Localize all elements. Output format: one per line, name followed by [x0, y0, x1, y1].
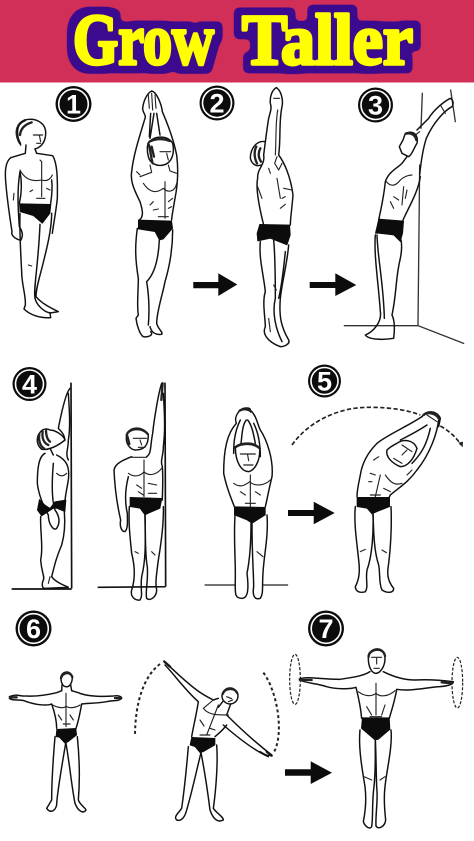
- floor: [205, 583, 288, 587]
- title: Grow: [73, 0, 214, 80]
- dashed motion arcs: [135, 664, 279, 753]
- step 3 badge: 3: [368, 90, 383, 120]
- step 4 badge: [12, 367, 46, 401]
- step 2 badge: [200, 86, 234, 120]
- step 5 badge: [308, 364, 341, 398]
- step 6 badge: 6: [26, 614, 41, 644]
- step 3 badge: [358, 88, 393, 122]
- step 2 badge: 2: [209, 88, 225, 118]
- figure: step 5 arms overhead: [205, 408, 288, 599]
- header banner: [0, 0, 474, 82]
- step 5 badge: 5: [317, 366, 332, 396]
- step 6 badge: [16, 610, 52, 646]
- title: Taller: [242, 0, 413, 80]
- figure: step 4 side view against wall: [12, 383, 72, 589]
- figure: step 7 arm circles: [290, 649, 463, 828]
- dashed motion arc: [292, 407, 461, 445]
- title: [73, 0, 413, 80]
- arrow: step 5: [288, 502, 335, 524]
- wall and floor: [98, 383, 166, 587]
- figure: step 5 side bend: [292, 407, 463, 592]
- step 1 badge: 1: [66, 90, 81, 120]
- arrow: step 2 to step 3: [310, 273, 356, 296]
- figure: step 2 front view arms up: [131, 91, 178, 337]
- figure: step 3 against wall: [344, 90, 464, 343]
- arrow: step 2 front to side: [193, 273, 237, 296]
- dashed circles: [290, 654, 300, 704]
- figure: step 1 standing: [5, 119, 58, 318]
- step 4 badge: 4: [22, 370, 37, 400]
- figure: step 6 arms out: [9, 672, 122, 812]
- figure: step 2 side view: [250, 88, 293, 347]
- step 1 badge: [56, 86, 92, 122]
- arrow: step 6 to step 7: [285, 761, 332, 784]
- wall and floor: [12, 383, 72, 589]
- wall and floor: [344, 90, 464, 343]
- figure: step 6 side bend: [135, 661, 279, 821]
- step 7 badge: 7: [318, 614, 334, 644]
- figure: step 4 front view against wall: [98, 383, 166, 600]
- step 7 badge: [308, 610, 344, 646]
